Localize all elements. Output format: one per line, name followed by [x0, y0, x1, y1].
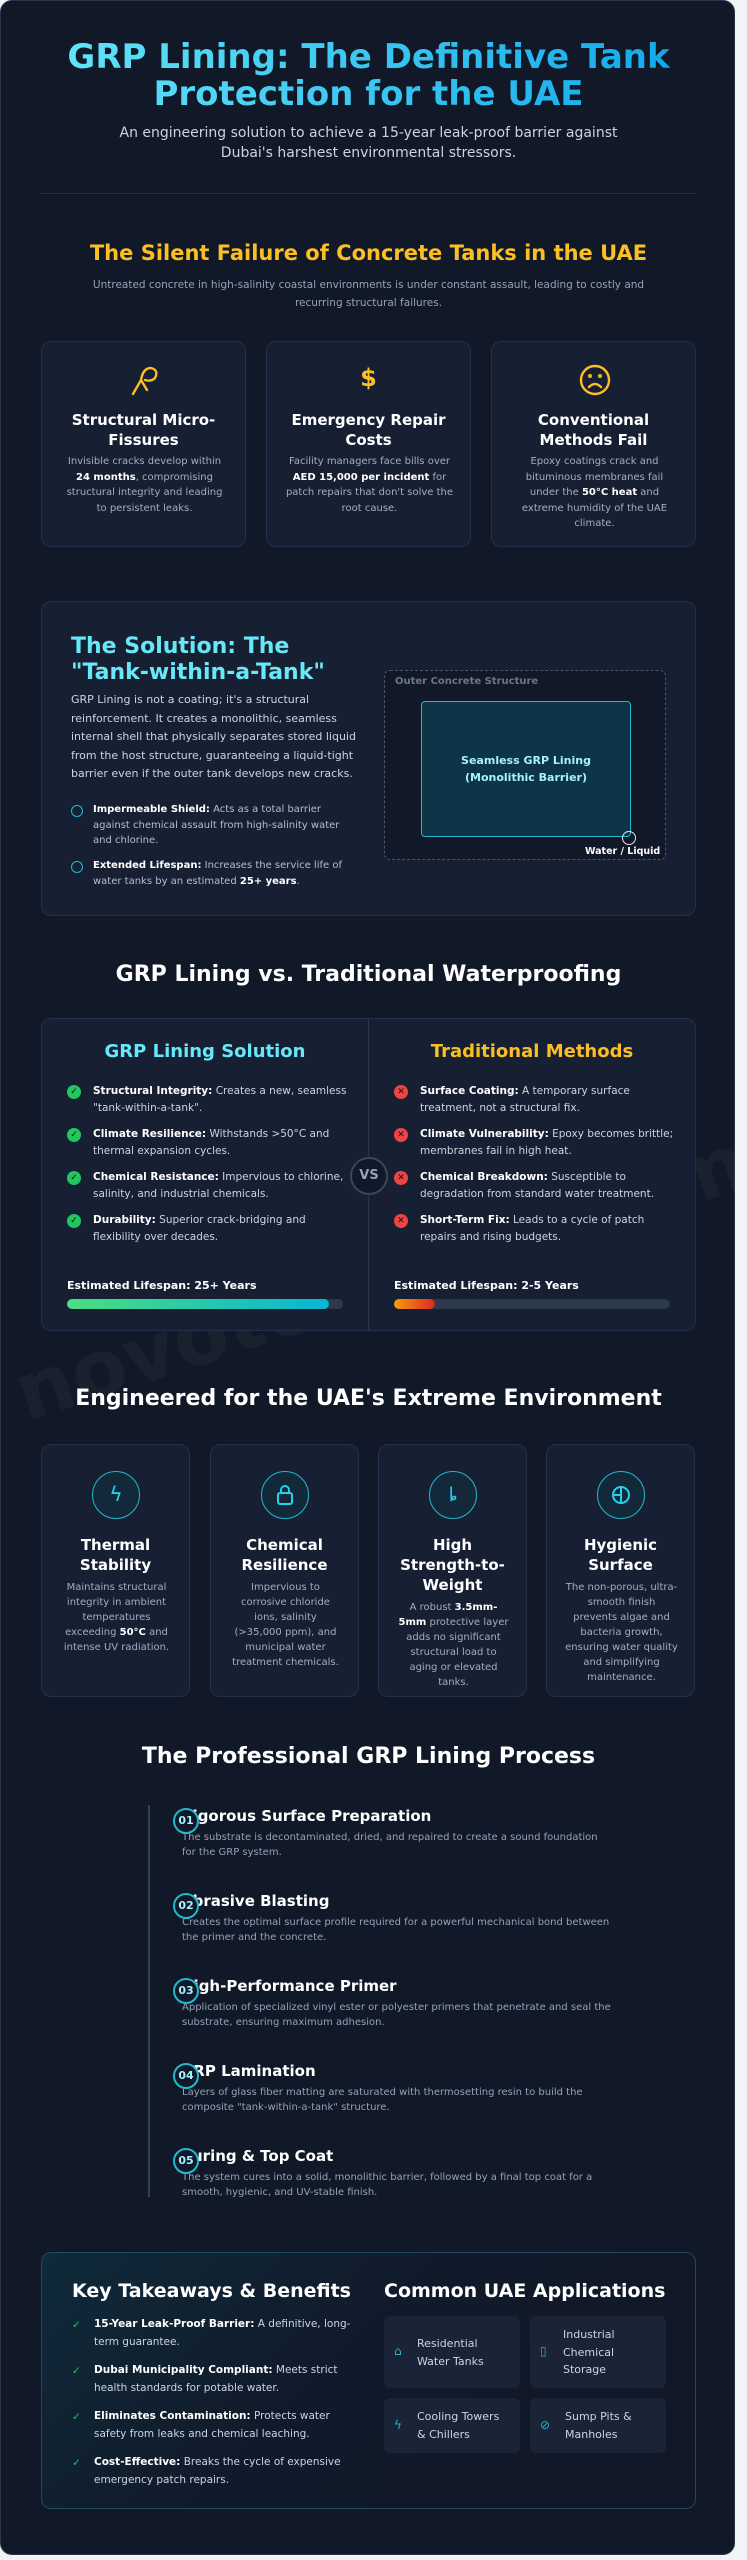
column: traditional: Chemical Breakdown: Susceptible to degradation from standard water treatment. — [420, 1171, 654, 1200]
diagram: tank: Water / Liquid — [585, 846, 660, 857]
column: GRP: Durability: Superior crack-bridging and flexibility over decades. — [93, 1214, 306, 1243]
step 03: 03 — [178, 1984, 194, 1997]
watermark: novotechnic.com — [3, 1115, 747, 1440]
panel: comparison — [41, 1018, 696, 1331]
tile: industrial: ▯ — [540, 2344, 547, 2358]
step 02: Abrasive Blasting — [181, 1892, 329, 1910]
tile: cooling: ϟ — [394, 2418, 402, 2432]
step 03: High-Performance Primer — [181, 1977, 397, 1995]
panel: takeaways — [41, 2252, 696, 2509]
panel: costs: Facility managers face bills over AED 15,000 per incident for patch repairs that don't solve the root cause. — [286, 456, 453, 514]
step 05: Curing & Top Coat — [181, 2147, 333, 2165]
column: GRP: Chemical Resistance: Impervious to chlorine, salinity, and industrial chemicals. — [93, 1171, 343, 1200]
step 02: Creates the optimal surface profile required for a powerful mechanical bond between the primer and the concrete. — [182, 1917, 609, 1942]
diagram: tank — [384, 670, 666, 860]
column: traditional: ✕ — [397, 1087, 405, 1097]
panel: costs: Costs — [345, 431, 392, 449]
panel: hygienic: Hygienic — [584, 1536, 657, 1554]
icon: strength: ȴ — [449, 1484, 457, 1505]
step 05: The system cures into a solid, monolithic barrier, followed by a final top coat for a smooth, hygienic, and UV-stable finish. — [182, 2172, 592, 2198]
step 04: GRP Lamination — [181, 2062, 316, 2080]
panel: strength — [378, 1444, 527, 1697]
icon: strength — [429, 1471, 477, 1519]
icon: dollar: $ — [360, 364, 377, 392]
tile: cooling: Cooling Towers — [417, 2410, 499, 2423]
heading: environment: Engineered for the UAE's Extreme Environment — [75, 1386, 662, 1411]
panel: costs: Emergency Repair — [291, 411, 446, 429]
title: GRP Lining: The Definitive Tank — [67, 37, 670, 77]
column: traditional — [394, 1041, 673, 1309]
panel: chemical: Chemical — [246, 1536, 323, 1554]
panel: costs — [266, 341, 471, 547]
icon: lock — [261, 1471, 309, 1519]
tile: industrial: Industrial — [563, 2328, 615, 2341]
bullet: lifespan: Extended Lifespan: Increases the service life of water tanks by an estimated 25+ years. — [93, 860, 342, 886]
step 03: Application of specialized vinyl ester or polyester primers that penetrate and seal the substrate, ensuring maximum adhesion. — [182, 2002, 611, 2028]
panel: hygienic: Surface — [588, 1556, 653, 1574]
heading: comparison: GRP Lining vs. Traditional Waterproofing — [116, 962, 621, 987]
bar: traditional lifespan — [394, 1299, 670, 1309]
panel: strength: Weight — [423, 1576, 482, 1594]
VS badge: VS — [359, 1168, 379, 1183]
list: takeaways: ✓ — [72, 2411, 81, 2423]
step 04: 04 — [178, 2069, 194, 2082]
column: GRP: GRP Lining Solution — [105, 1041, 305, 1062]
list: takeaways: ✓ — [72, 2319, 81, 2331]
panel: strength: A robust 3.5mm-5mm protective layer adds no significant structural load to aging or elevated tanks. — [399, 1602, 508, 1688]
panel: chemical: Impervious to corrosive chloride ions, salinity (>35,000 ppm), and municipal water treatment chemicals. — [232, 1582, 339, 1668]
panel: fissures: Fissures — [108, 431, 179, 449]
list: takeaways: Dubai Municipality Compliant: Meets strict health standards for potable water. — [94, 2364, 338, 2394]
icon: bolt: ϟ — [109, 1482, 123, 1506]
tile: residential — [384, 2316, 520, 2388]
panel: solution — [41, 601, 696, 916]
column: traditional: ✕ — [397, 1130, 405, 1140]
list: takeaways: ✓ — [72, 2365, 81, 2377]
list: takeaways — [72, 2318, 350, 2486]
column: GRP: ✓ — [70, 1087, 78, 1097]
column: GRP: ✓ — [70, 1216, 78, 1226]
heading: solution: "Tank-within-a-Tank" — [71, 660, 325, 685]
title — [21, 39, 716, 113]
column: GRP: ✓ — [70, 1130, 78, 1140]
tile: industrial — [530, 2316, 666, 2388]
tile: sump: Sump Pits & — [565, 2410, 632, 2423]
icon: sad face — [580, 364, 610, 396]
column: traditional: Estimated Lifespan: 2-5 Years — [394, 1279, 579, 1292]
tile: residential: ⌂ — [394, 2344, 402, 2358]
panel: methods fail: Conventional — [538, 411, 649, 429]
heading: solution — [71, 634, 325, 685]
column: traditional: ✕ — [397, 1173, 405, 1183]
panel: fissures — [41, 341, 246, 547]
title: Protection for the UAE — [153, 74, 584, 114]
panel: strength: Strength-to- — [400, 1556, 505, 1574]
tile: sump: ⊘ — [540, 2418, 550, 2432]
panel: thermal: Maintains structural integrity in ambient temperatures exceeding 50°C and intense UV radiation. — [64, 1582, 169, 1653]
step 05 — [173, 2147, 592, 2198]
list: takeaways: ✓ — [72, 2457, 81, 2469]
column: traditional: Climate Vulnerability: Epoxy becomes brittle; membranes fail in high heat. — [420, 1128, 673, 1157]
column: GRP: Climate Resilience: Withstands >50°C and thermal expansion cycles. — [93, 1128, 329, 1157]
column: traditional: Surface Coating: A temporary surface treatment, not a structural fix. — [420, 1085, 630, 1114]
list: takeaways: Cost-Effective: Breaks the cycle of expensive emergency patch repairs. — [94, 2456, 341, 2486]
panel: fissures: Invisible cracks develop within 24 months, compromising structural integrity and leading to persistent leaks. — [67, 456, 222, 514]
step 05: 05 — [178, 2154, 194, 2167]
panel: thermal: Thermal — [81, 1536, 150, 1554]
icon: crack — [132, 366, 158, 396]
inner lining: (Monolithic Barrier) — [465, 771, 587, 784]
tile: industrial: Storage — [563, 2363, 606, 2376]
step 01: Rigorous Surface Preparation — [181, 1807, 431, 1825]
heading: process: The Professional GRP Lining Process — [142, 1744, 595, 1769]
tile: cooling — [384, 2398, 520, 2453]
step 04 — [173, 2062, 583, 2112]
column: traditional: Traditional Methods — [431, 1041, 633, 1062]
tile: residential: Residential — [417, 2337, 478, 2350]
diagram: tank: Outer Concrete Structure — [395, 676, 538, 687]
column: GRP — [67, 1041, 346, 1309]
heading: applications: Common UAE Applications — [384, 2280, 665, 2302]
list: takeaways: 15-Year Leak-Proof Barrier: A definitive, long-term guarantee. — [94, 2318, 350, 2348]
column: traditional: Short-Term Fix: Leads to a cycle of patch repairs and rising budgets. — [420, 1214, 644, 1243]
step 01 — [173, 1807, 598, 1858]
panel: methods fail — [491, 341, 696, 547]
heading: silent failure: The Silent Failure of Concrete Tanks in the UAE — [90, 241, 647, 265]
panel: fissures: Structural Micro- — [72, 411, 215, 429]
tile: cooling: & Chillers — [417, 2428, 470, 2440]
step 01: The substrate is decontaminated, dried, and repaired to create a sound foundation for the GRP system. — [182, 1832, 598, 1858]
icon: bolt — [92, 1471, 140, 1519]
step 02: 02 — [178, 1899, 194, 1912]
list: takeaways: Eliminates Contamination: Protects water safety from leaks and chemical leaching. — [94, 2410, 330, 2440]
text: solution: GRP Lining is not a coating; it's a structural reinforcement. It creates a monolithic, seamless internal shell that physically separates stored liquid from the host structure, guaranteeing a liquid-tight barrier even if the outer tank develops new cracks. — [71, 693, 356, 780]
panel: chemical — [210, 1444, 359, 1697]
panel: strength: High — [433, 1536, 472, 1554]
column: GRP: Estimated Lifespan: 25+ Years — [67, 1279, 256, 1292]
step 01: 01 — [178, 1814, 194, 1827]
tile: sump: Manholes — [565, 2428, 617, 2440]
heading: takeaways: Key Takeaways & Benefits — [72, 2280, 351, 2302]
step 02 — [173, 1892, 609, 1942]
icon: leaf — [597, 1471, 645, 1519]
panel: methods fail: Methods Fail — [540, 431, 647, 449]
panel: thermal — [41, 1444, 190, 1697]
VS badge — [350, 1157, 388, 1195]
subheading: Untreated concrete in high-salinity coastal environments is under constant assault, leading to costly and recurring structural failures. — [93, 279, 644, 309]
tile: residential: Water Tanks — [417, 2354, 484, 2368]
panel: thermal: Stability — [80, 1556, 151, 1574]
panel: hygienic — [546, 1444, 695, 1697]
panel: methods fail: Epoxy coatings crack and bituminous membranes fail under the 50°C heat and extreme humidity of the UAE climate. — [522, 456, 667, 529]
subtitle: An engineering solution to achieve a 15-year leak-proof barrier against Dubai's harshest environmental stressors. — [120, 125, 617, 161]
tile: sump — [530, 2398, 666, 2453]
bullet: impermeable: Impermeable Shield: Acts as a total barrier against chemical assault from high-salinity water and chlorine. — [93, 804, 339, 846]
step 04: Layers of glass fiber matting are saturated with thermosetting resin to build the composite "tank-within-a-tank" structure. — [182, 2087, 583, 2112]
tile: industrial: Chemical — [563, 2346, 614, 2358]
inner lining — [421, 701, 631, 837]
inner lining: Seamless GRP Lining — [461, 754, 591, 767]
column: GRP: ✓ — [70, 1173, 78, 1183]
panel: chemical: Resilience — [242, 1556, 328, 1574]
heading: solution: The Solution: The — [71, 634, 289, 659]
bar: GRP lifespan — [67, 1299, 343, 1309]
column: GRP: Structural Integrity: Creates a new, seamless "tank-within-a-tank". — [93, 1085, 346, 1114]
panel: hygienic: The non-porous, ultra-smooth finish prevents algae and bacteria growth, ensuring water quality and simplifying maintenance. — [565, 1582, 678, 1683]
step 03 — [173, 1977, 611, 2028]
column: traditional: ✕ — [397, 1216, 405, 1226]
